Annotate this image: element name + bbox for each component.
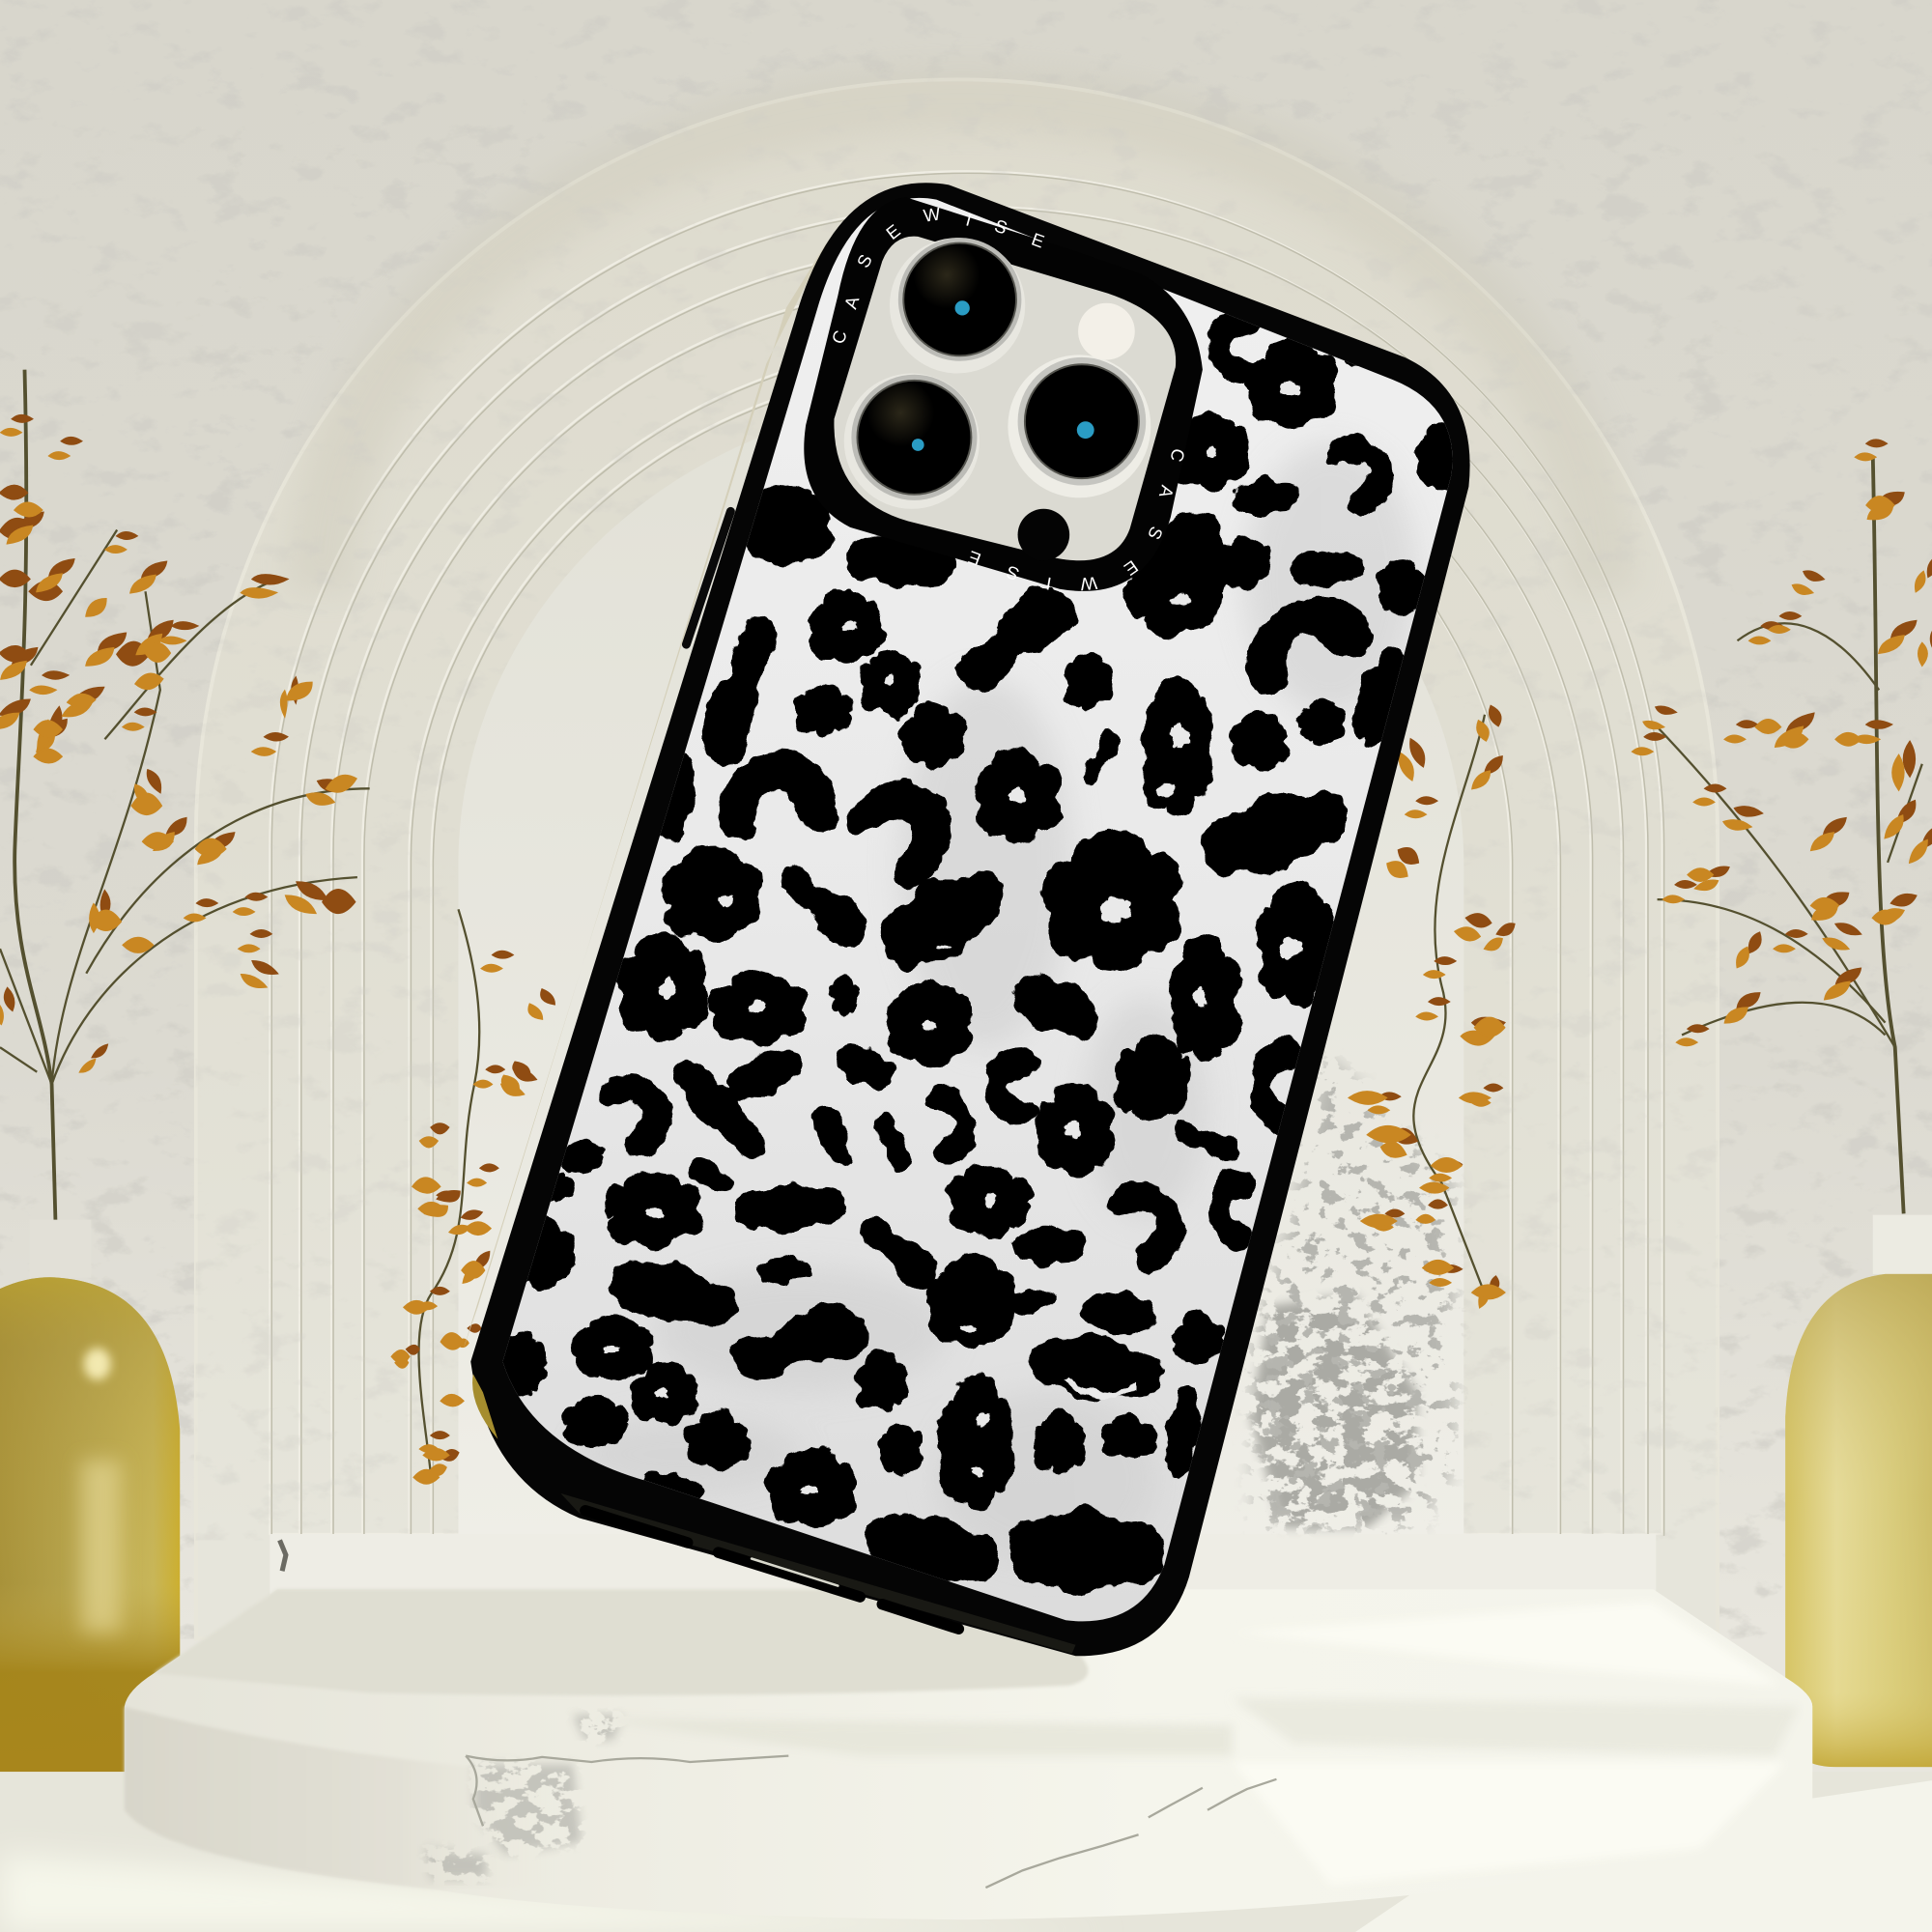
plant branches	[0, 370, 1922, 1479]
left gold vase	[0, 1220, 180, 1772]
phone shadow on platform	[154, 1589, 1088, 1695]
lens bottom left	[844, 373, 980, 509]
plant leaves light	[0, 429, 1927, 1484]
case back panel	[502, 198, 1453, 1621]
gold reflection on case edge	[472, 1374, 497, 1439]
camera ring	[804, 197, 1203, 591]
brand text top: CASEWISE	[828, 203, 1047, 347]
lens top	[890, 238, 1025, 373]
microphone dot	[1018, 509, 1069, 560]
side buttons	[686, 511, 730, 644]
case body	[470, 183, 1470, 1656]
port openings	[585, 1511, 958, 1629]
floor	[0, 1772, 1932, 1932]
phone case	[464, 183, 1470, 1656]
niche floor band	[270, 1534, 1656, 1596]
plant leaves dark	[0, 415, 1932, 1461]
lens right	[1008, 355, 1151, 497]
sunlight and shade streaks	[591, 1602, 1799, 1886]
glossy lower edge	[560, 1493, 1076, 1654]
phone side edge	[464, 241, 828, 1350]
marble veins	[423, 1711, 622, 1884]
flash	[1078, 303, 1135, 359]
rosette centres	[604, 381, 1300, 1496]
left front face	[125, 1707, 579, 1889]
right gold vase	[1785, 1215, 1932, 1767]
camera plate	[834, 237, 1176, 560]
marble veins on niche wall	[280, 1041, 1472, 1571]
marble platform	[125, 1589, 1812, 1919]
stepped arch niche	[196, 74, 1718, 1638]
leopard pattern	[497, 312, 1465, 1602]
brand text bottom: CASEWISE	[965, 446, 1189, 595]
